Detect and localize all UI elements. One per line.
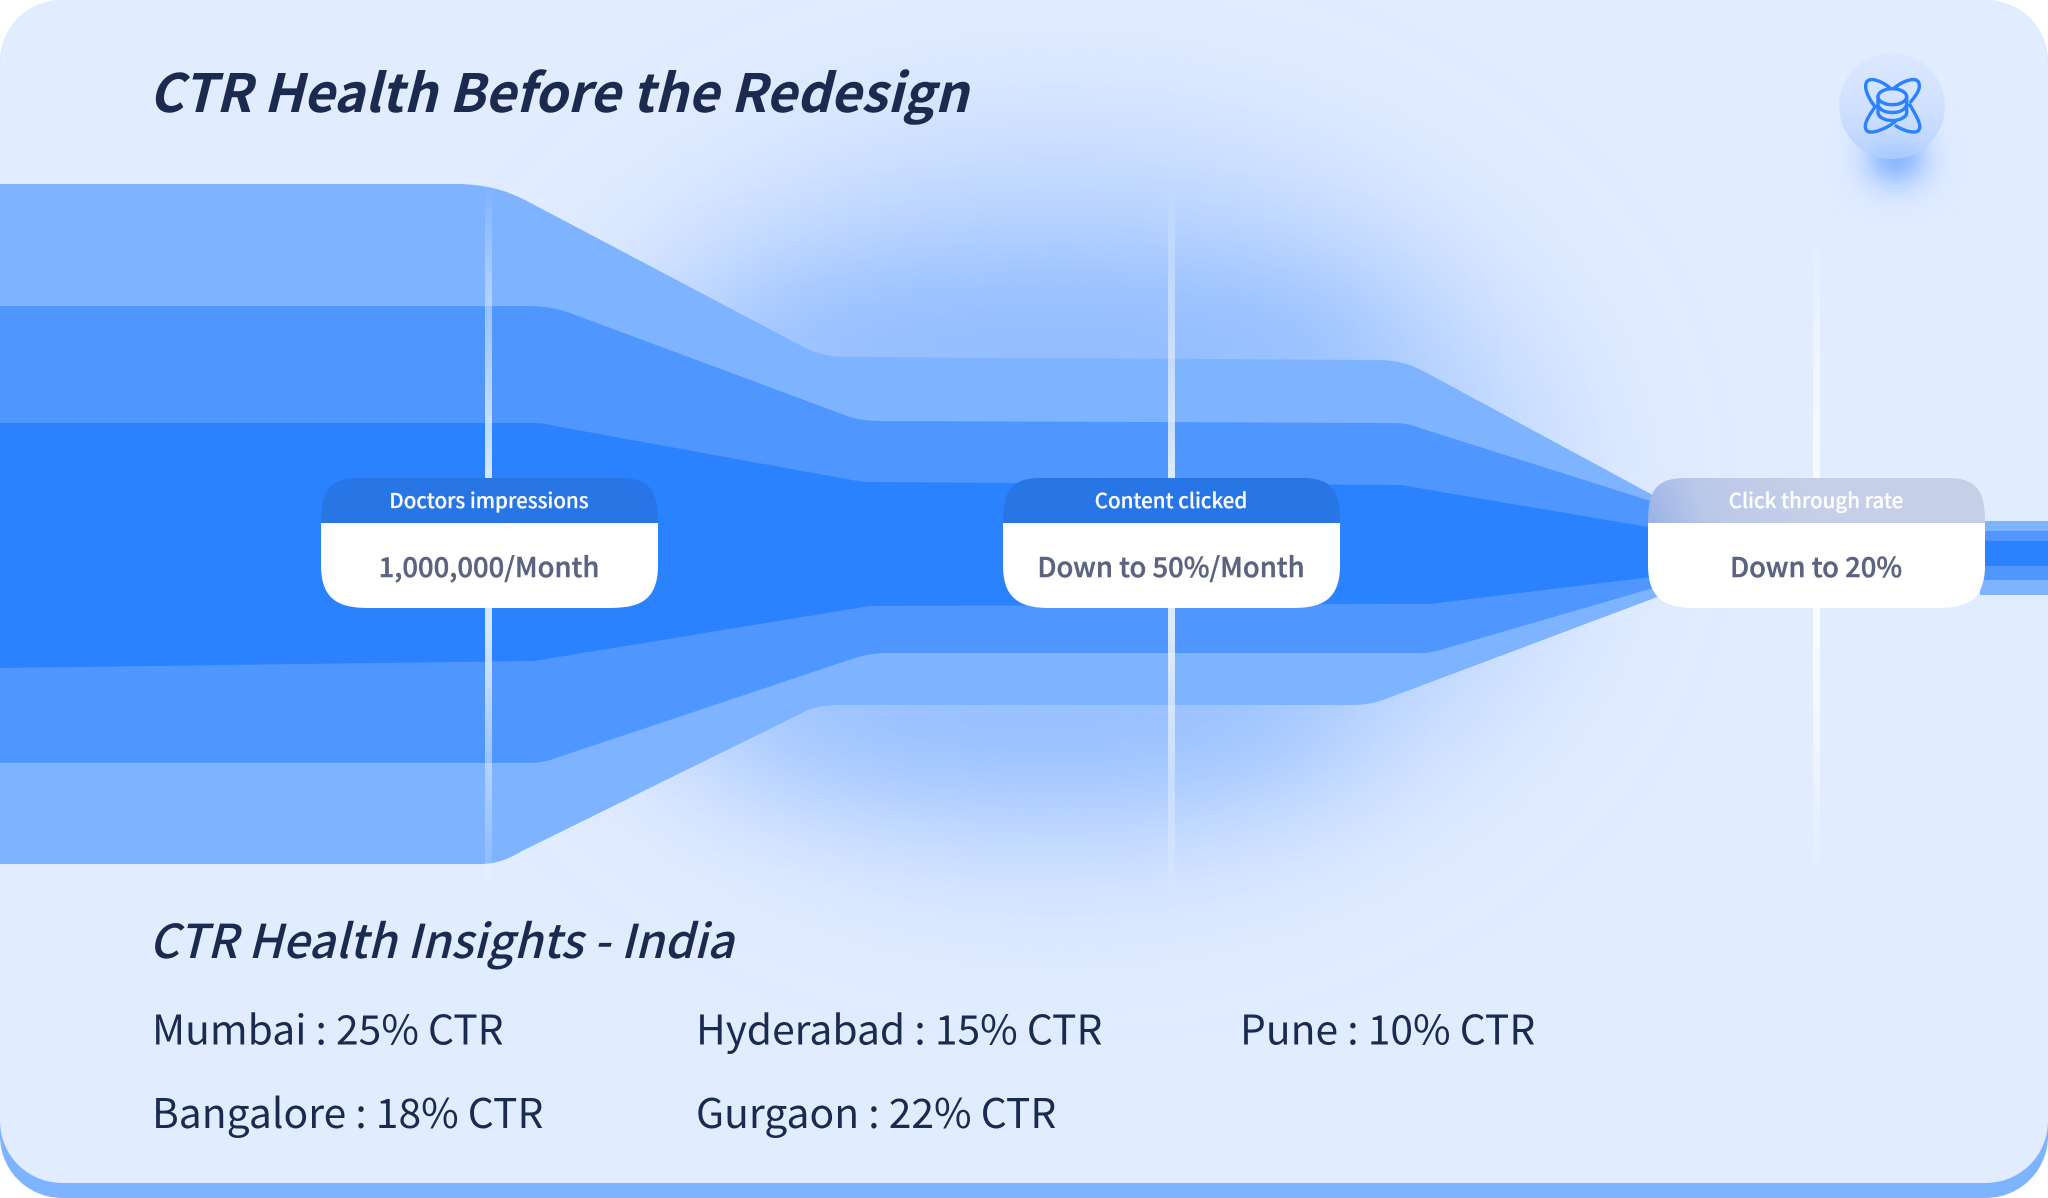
stage card: content clicked [1003,478,1340,608]
stage card: content clicked: Content clicked [1095,484,1247,514]
stage card: click through rate: Click through rate [1729,484,1903,514]
insight: Bangalore: Bangalore : 18% CTR [152,1081,543,1140]
funnel band: outer light [0,184,1660,864]
background glow behind funnel [580,160,1540,840]
insight: Gurgaon: Gurgaon : 22% CTR [696,1081,1056,1140]
icon: database atom [1839,53,1945,190]
funnel band: core [0,423,1660,668]
insight: Pune: Pune : 10% CTR [1240,998,1535,1056]
icon circle [1839,53,1945,159]
funnel outflow on right [1980,521,2048,595]
heading: insights: CTR Health Insights - India [149,905,736,972]
stage card: doctors impressions: Doctors impressions [389,484,589,514]
insight: Mumbai: Mumbai : 25% CTR [152,998,504,1056]
stage card: click through rate [1648,478,1985,608]
stage card: doctors impressions [321,478,658,608]
insight: Hyderabad: Hyderabad : 15% CTR [696,998,1102,1056]
funnel chart [0,184,2048,864]
funnel band: middle [0,306,1660,763]
stage card: click through rate: Down to 20% [1730,545,1902,585]
icon rings and cylinder [1865,80,1920,132]
icon glow [1860,130,1932,190]
stage card: doctors impressions: 1,000,000/Month [379,545,599,585]
stage divider lines [485,184,1820,904]
insights list [152,998,1535,1140]
stage card: content clicked: Down to 50%/Month [1037,545,1305,585]
title: CTR Health Before the Redesign [149,52,971,128]
